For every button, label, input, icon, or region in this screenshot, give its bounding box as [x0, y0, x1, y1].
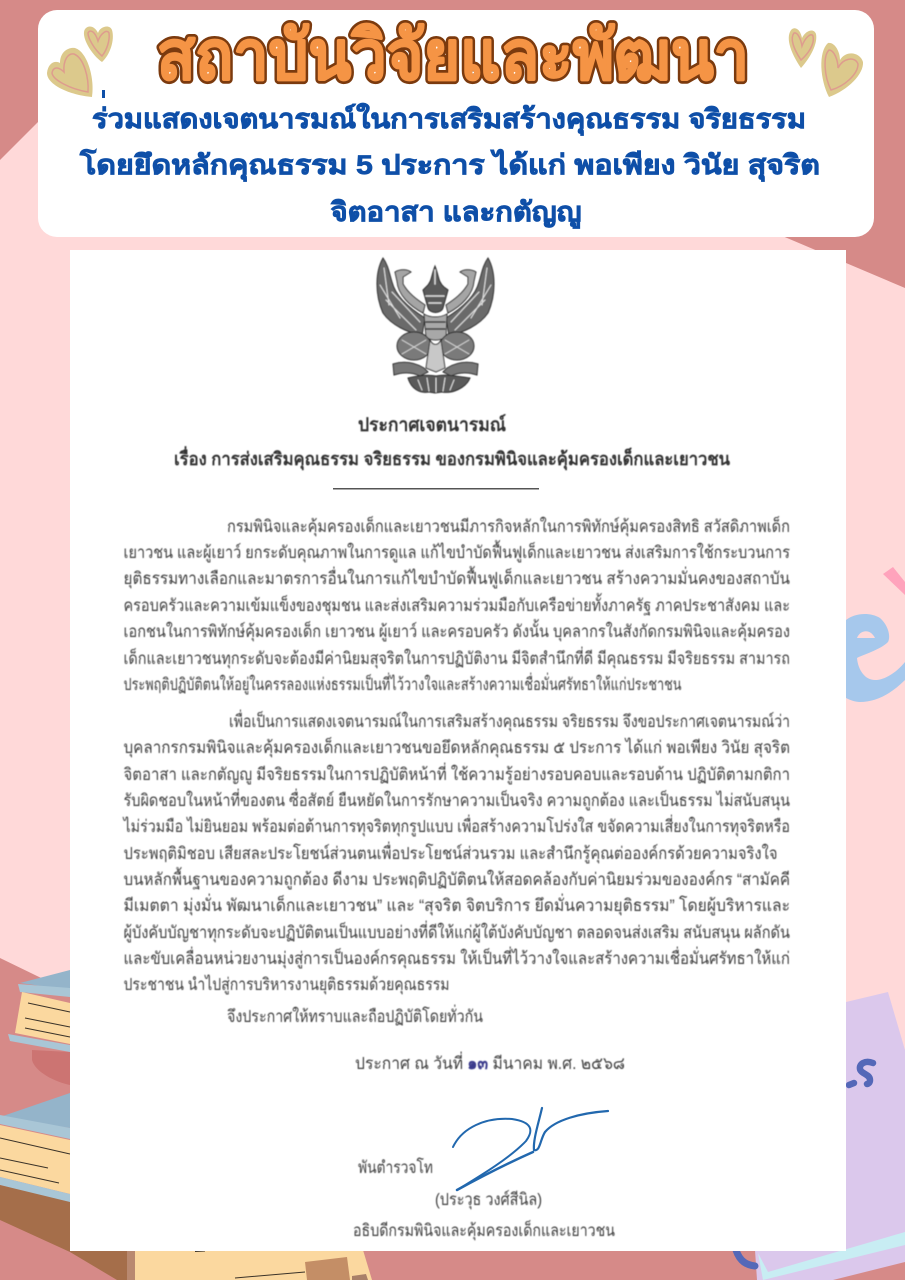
body paragraph 2: บุคลากรกรมพินิจและคุ้มครองเด็กและเยาวชนขอยึดหลักคุณธรรม ๕ ประการ ได้แก่ พอเพียง วินัย สุจริต	[124, 736, 790, 758]
body paragraph 2: เพื่อเป็นการแสดงเจตนารมณ์ในการเสริมสร้างคุณธรรม จริยธรรม จึงขอประกาศเจตนารมณ์ว่า	[229, 709, 790, 732]
body paragraph 2: รับผิดชอบในหน้าที่ของตน ซื่อสัตย์ ยืนหยัดในการรักษาความเป็นจริง ความถูกต้อง และเป็นธรรม ไม่สนับสนุน	[124, 788, 790, 811]
icon: hearts right	[789, 28, 863, 97]
document heading: ประกาศเจตนารมณ์	[358, 414, 506, 436]
decoration: stacked books left	[0, 970, 127, 1280]
body paragraph 2: ผู้บังคับบัญชาทุกระดับจะปฏิบัติตนเป็นแบบอย่างที่ดีให้แก่ผู้ใต้บังคับบัญชา ตลอดจนส่งเสริม สนับสนุน ผลักดัน	[124, 920, 790, 943]
signature	[453, 1108, 608, 1190]
body paragraph 2: จิตอาสา และกตัญญู มีจริยธรรมในการปฏิบัติหน้าที่ ใช้ความรู้อย่างรอบคอบและรอบด้าน ปฏิบัติตามกติกา	[123, 762, 790, 785]
body paragraph 2: ประชาชน นำไปสู่การบริหารงานยุติธรรมด้วยคุณธรรม	[124, 974, 450, 995]
date line: ประกาศ ณ วันที่ ๑๓ มีนาคม พ.ศ. ๒๕๖๘	[355, 1051, 625, 1073]
body paragraph 1: เยาวชน และผู้เยาว์ ยกระดับคุณภาพในการดูแล แก้ไขบำบัดฟื้นฟูเด็กและเยาวชน ส่งเสริมการใช้กระบวนการ	[124, 540, 790, 563]
document heading: เรื่อง การส่งเสริมคุณธรรม จริยธรรม ของกรมพินิจและคุ้มครองเด็กและเยาวชน	[174, 446, 731, 471]
title: สถาบันวิจัยและพัฒนา	[157, 18, 749, 94]
body paragraph 1: ยุติธรรมทางเลือกและมาตรการอื่นในการแก้ไขบำบัดฟื้นฟูเด็กและเยาวชน สร้างความมั่นคงของสถาบัน	[124, 566, 790, 589]
document panel	[70, 250, 846, 1251]
title: สถาบันวิจัยและพัฒนา	[157, 18, 749, 94]
header card	[38, 10, 874, 237]
icon: Garuda emblem	[377, 258, 494, 393]
body paragraph 1: ครอบครัวและความเข้มแข็งของชุมชน และส่งเสริมความร่วมมือกับเครือข่ายทั้งภาครัฐ ภาคประชาสังคม และ	[124, 593, 790, 616]
body paragraph 1: กรมพินิจและคุ้มครองเด็กและเยาวชนมีภารกิจหลักในการพิทักษ์คุ้มครองสิทธิ สวัสดิภาพเด็ก	[227, 515, 790, 537]
decoration: lavender notebook right	[736, 992, 905, 1280]
decoration: book bottom centre	[127, 1250, 372, 1280]
body paragraph 2: ประพฤติมิชอบ เสียสละประโยชน์ส่วนตนเพื่อประโยชน์ส่วนรวม และสำนึกรู้คุณต่อองค์กรด้วยความจริงใจ	[124, 841, 778, 864]
signatory block: พันตำรวจโท	[358, 1157, 433, 1177]
document heading	[174, 414, 731, 471]
subtitle: โดยยึดหลักคุณธรรม 5 ประการ ได้แก่ พอเพียง วินัย สุจริต	[79, 148, 820, 182]
subtitle: จิตอาสา และกตัญญู	[330, 197, 582, 229]
body paragraph 2: บนหลักพื้นฐานของความถูกต้อง ดีงาม ประพฤติปฏิบัติตนให้สอดคล้องกับค่านิยมร่วมขององค์กร “สามัคคี	[124, 867, 790, 890]
body paragraph 2: มีเมตตา มุ่งมั่น พัฒนาเด็กและเยาวชน” และ “สุจริต จิตบริการ ยึดมั่นความยุติธรรม” โดยผู้บริหารและ	[124, 893, 790, 916]
subtitle: ร่วมแสดงเจตนารมณ์ในการเสริมสร้างคุณธรรม จริยธรรม	[92, 103, 806, 136]
signatory block: อธิบดีกรมพินิจและคุ้มครองเด็กและเยาวชน	[353, 1219, 615, 1241]
body paragraph 1: เอกชนในการพิทักษ์คุ้มครองเด็ก เยาวชน ผู้เยาว์ และครอบครัว ดังนั้น บุคลากรในสังกัดกรมพินิจและคุ้มครอง	[124, 619, 790, 642]
closing line: จึงประกาศให้ทราบและถือปฏิบัติโดยทั่วกัน	[227, 1004, 483, 1026]
body paragraph 2: ไม่ร่วมมือ ไม่ยินยอม พร้อมต่อต้านการทุจริตทุกรูปแบบ เพื่อสร้างความโปร่งใส ขจัดความเสี่ยงในการทุจริตหรือ	[122, 814, 790, 837]
body paragraph 1	[124, 515, 790, 695]
body paragraph 2	[122, 709, 790, 995]
signatory block	[353, 1157, 615, 1241]
decoration: letter e right	[846, 567, 905, 702]
subtitle	[79, 90, 820, 229]
body paragraph 2: และขับเคลื่อนหน่วยงานมุ่งสู่การเป็นองค์กรคุณธรรม ให้เป็นที่ไว้วางใจและสร้างความเชื่อมั่นศรัทธาให้แก่	[124, 946, 790, 969]
signatory block: (ประวุธ วงศ์สีนิล)	[435, 1190, 542, 1210]
body paragraph 1: ประพฤติปฏิบัติตนให้อยู่ในครรลองแห่งธรรมเป็นที่ไว้วางใจและสร้างความเชื่อมั่นศรัทธาให้แก่ประชาชน	[124, 672, 682, 695]
body paragraph 1: เด็กและเยาวชนทุกระดับจะต้องมีค่านิยมสุจริตในการปฏิบัติงาน มีจิตสำนึกที่ดี มีคุณธรรม มีจริยธรรม สามารถ	[124, 646, 790, 669]
icon: hearts left	[47, 26, 113, 97]
